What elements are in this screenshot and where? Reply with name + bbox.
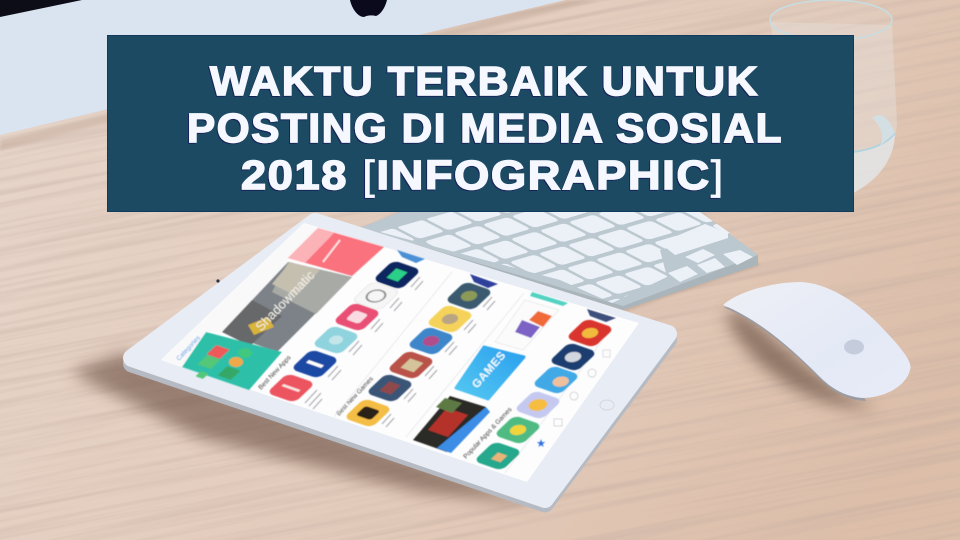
tablet [70,222,668,505]
title text: POSTING DI MEDIA SOSIAL [187,105,783,151]
tile: teal promo [182,332,282,390]
row: best new apps icons [266,260,422,403]
label: Categories: Categories [175,334,202,362]
return key [660,224,728,255]
banner: GAMES: GAMES [470,349,509,391]
arrow keys [668,249,753,282]
small app captions [305,277,495,427]
icon: featured star: ★ [536,438,546,450]
row: popular apps icons [473,309,616,471]
icon: apple logo on monitor [350,0,387,17]
tab bar: bottom icons [536,350,610,450]
banner: Marvel game [413,396,490,453]
title banner [108,36,854,212]
tablet shadow [70,352,540,505]
title text: WAKTU TERBAIK UNTUK [210,58,759,104]
tile: Shadowmatic: Shadowmatic [252,267,318,334]
tile: Shadowmatic [222,262,352,352]
glass of water [770,0,897,193]
tile: pink promo [288,228,384,276]
mouse [723,282,911,410]
label: Best New Apps: Best New Apps [257,354,293,391]
banner: GAMES [456,347,524,399]
keyboard [360,212,760,312]
label: Popular Apps & Games: Popular Apps & Games [462,406,514,460]
title text: 2018 [INFOGRAPHIC ] [241,152,725,198]
column dividers [334,272,612,473]
card: gift cards [495,292,568,350]
monitor base at top left [0,0,600,150]
row: best new games icons [343,250,498,428]
screen content [161,223,616,473]
tablet camera [216,279,220,283]
tablet screen [161,223,639,482]
tablet body [132,224,668,504]
tablet home button [600,400,614,410]
icon: apple logo on mouse [844,340,864,354]
top bar area [161,223,318,367]
label: Best New Games: Best New Games [335,375,375,417]
title text [187,58,783,198]
